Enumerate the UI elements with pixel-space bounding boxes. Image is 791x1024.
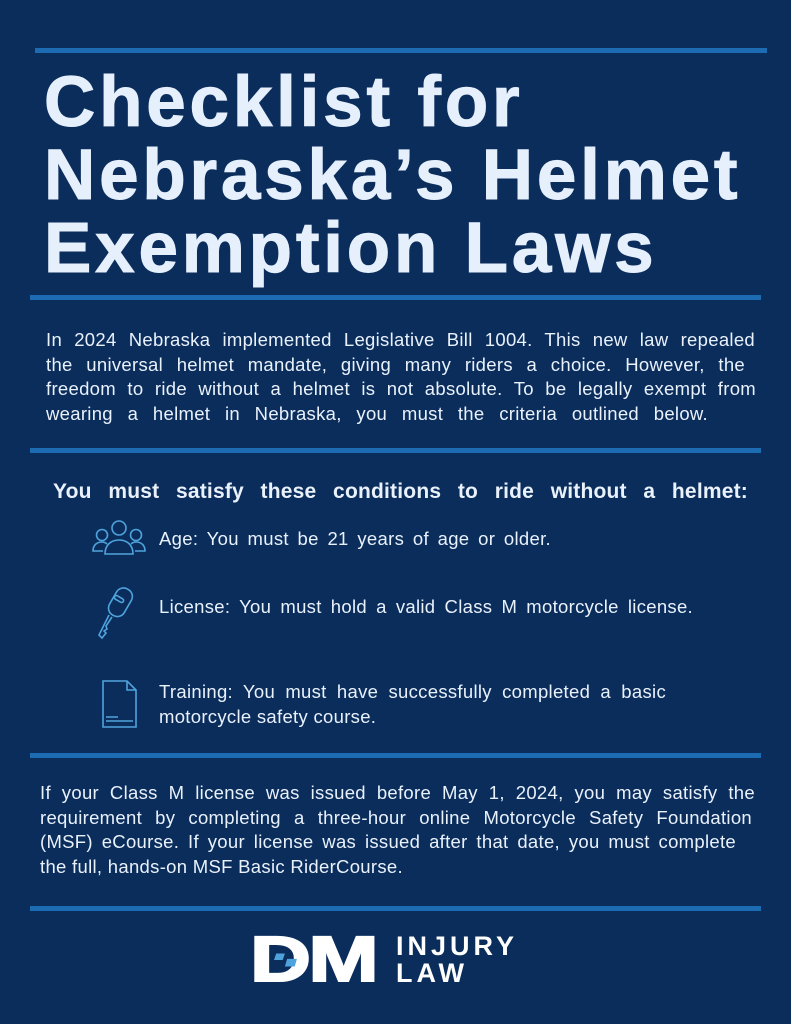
intro paragraph: freedom to ride without a helmet is not absolute. To be legally exempt from [46,378,756,399]
footnote paragraph [40,782,755,876]
title: Checklist for [44,63,523,142]
title: Exemption Laws [44,209,657,288]
item: license [98,587,693,640]
item: training [102,680,666,728]
conditions heading: You must satisfy these conditions to ride without a helmet: [53,480,748,503]
footnote paragraph: If your Class M license was issued before May 1, 2024, you may satisfy the [40,782,755,803]
intro paragraph [46,329,756,424]
intro paragraph: In 2024 Nebraska implemented Legislative Bill 1004. This new law repealed [46,329,755,350]
intro paragraph: wearing a helmet in Nebraska, you must the criteria outlined below. [46,402,708,424]
logo [250,923,518,995]
logo: INJURY [396,931,518,961]
text: training: motorcycle safety course. [159,706,376,726]
footnote paragraph: requirement by completing a three-hour online Motorcycle Safety Foundation [40,806,752,828]
text: training [159,681,666,727]
icon: people [92,520,146,555]
icon: key [98,587,134,640]
footnote paragraph: the full, hands-on MSF Basic RiderCourse. [40,856,403,876]
intro paragraph: the universal helmet mandate, giving many riders a choice. However, the [46,354,745,374]
title: Nebraska’s Helmet [44,136,741,215]
title [44,63,741,288]
item: age [92,520,551,555]
text: age: Age: You must be 21 years of age or older. [159,528,551,549]
icon: document [102,680,137,728]
logo: DM [250,923,376,995]
text: license: License: You must hold a valid Class M motorcycle license. [159,596,693,617]
text: training: Training: You must have successfully completed a basic [159,681,666,702]
logo: LAW [396,958,468,988]
footnote paragraph: (MSF) eCourse. If your license was issued after that date, you must complete [40,831,736,852]
